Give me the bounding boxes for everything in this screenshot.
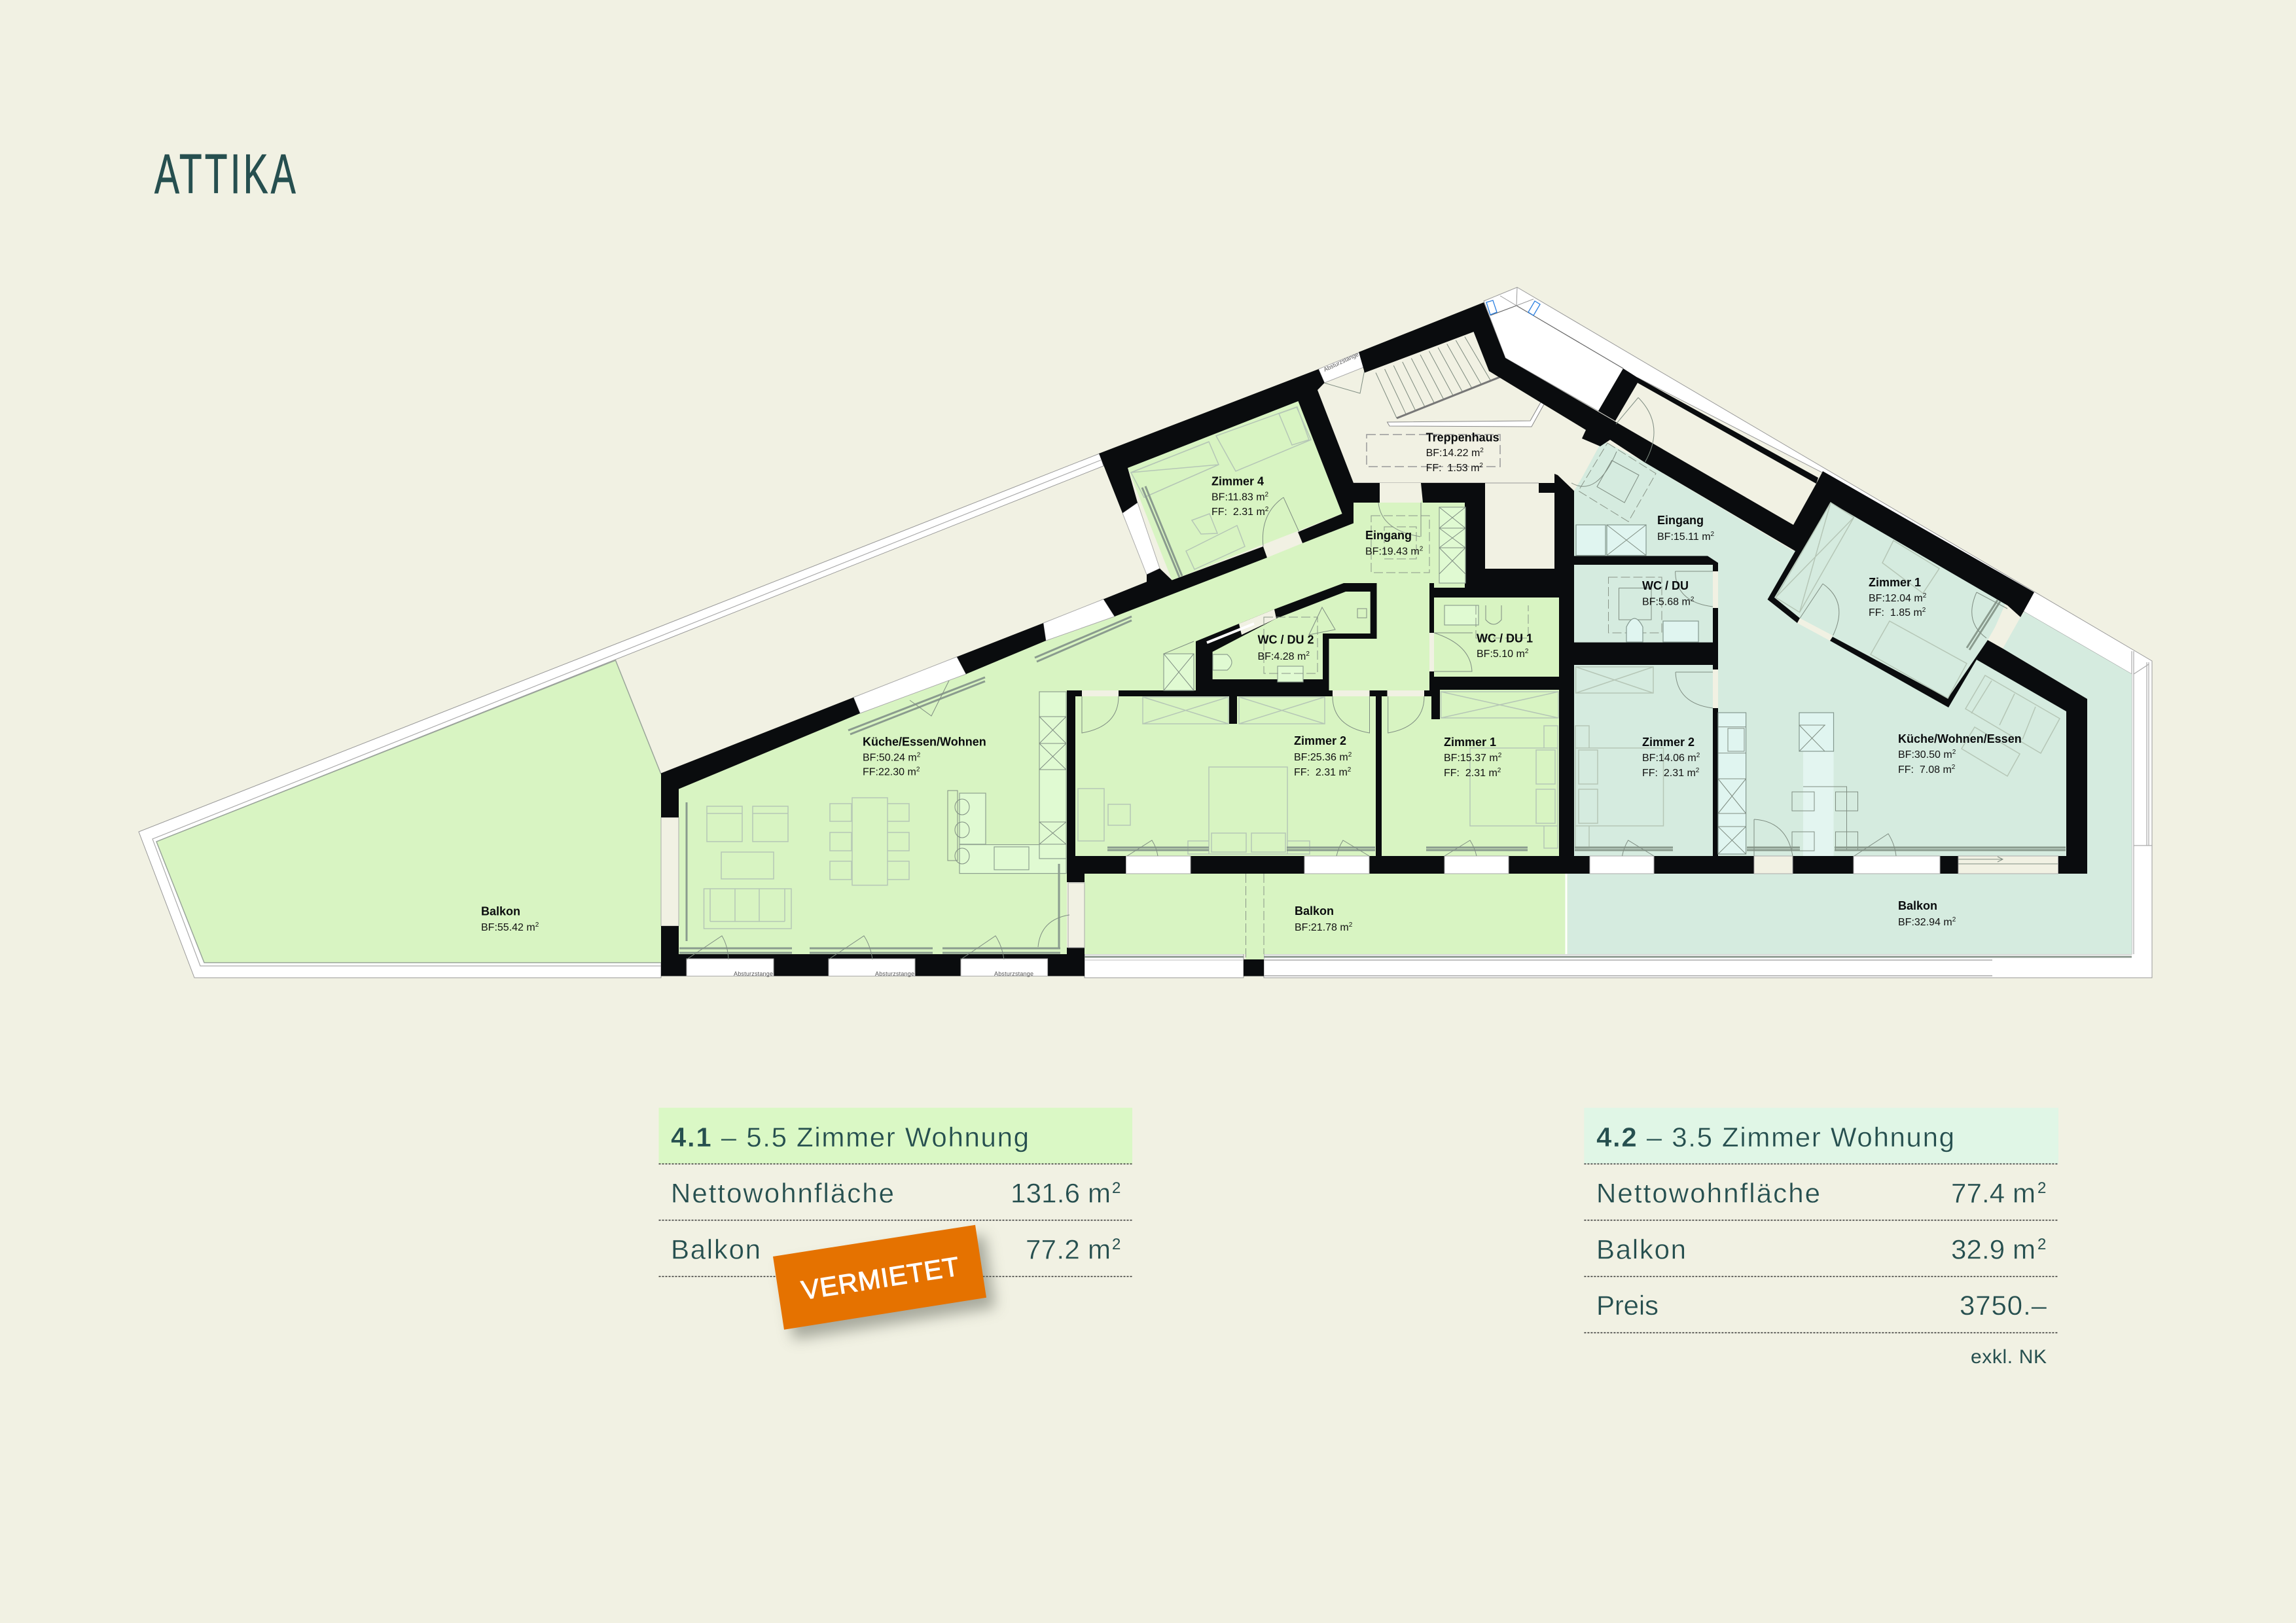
room label: WC DU: 2 [1691,596,1695,603]
room label: WC DU 1: BF:5.10 m [1477,649,1525,660]
room label: Balkon west: 2 [535,921,539,929]
room label: Zimmer 2 east [1642,736,1700,779]
furniture zimmer 2 east [1575,667,1713,856]
window openings west [853,352,1365,713]
balcony middle [1085,874,1568,959]
room label: Balkon east [1898,899,1956,928]
row Balkon 4.1 [671,1234,1121,1264]
floor plan [139,287,2152,978]
room label: Zimmer 2 east: 2 [1696,752,1700,759]
apartment 4.2 floor [1574,440,2068,857]
room label: Zimmer 2: 2 [1348,751,1352,758]
room label: Balkon east: 2 [1952,916,1956,923]
room label: WC DU 2: WC / DU 2 [1258,633,1314,646]
stamp: vermietet [773,1225,996,1340]
room label: Balkon west: Balkon [481,904,520,918]
room label: Kueche Essen Wohnen: Küche/Essen/Wohnen [863,735,986,748]
row Nettowohnflaeche 4.1: 131.6 m [1011,1178,1111,1208]
room label: Balkon middle: Balkon [1295,904,1334,918]
window labels: Absturzstange [1323,351,1359,373]
room label: Kueche Wohnen Essen: 2 [1952,749,1956,756]
room label: Zimmer 1 east: BF:12.04 m [1869,593,1923,604]
room label: Balkon middle [1295,904,1353,933]
room label: WC DU 1: WC / DU 1 [1477,632,1533,645]
stamp shadow [782,1235,996,1340]
room label: Eingang 4.1: 2 [1420,546,1424,553]
room label: Zimmer 4: FF: 2.31 m [1211,507,1265,518]
furniture zimmer 2 [1078,696,1375,856]
room label: Zimmer 4: Zimmer 4 [1211,474,1264,488]
stamp body [773,1225,986,1330]
room label: WC DU [1642,579,1695,607]
stairwell stairs [1324,336,1545,483]
row Preis 4.2: Preis [1596,1290,1659,1321]
room label: Zimmer 2 east: BF:14.06 m [1642,753,1696,764]
room label: Zimmer 1: BF:15.37 m [1444,753,1498,764]
window labels [734,351,1359,977]
black walls [661,302,2087,976]
furniture zimmer 1 [1388,692,1558,856]
furniture kitchen 4.1 [679,616,1132,959]
room label: Kueche Wohnen Essen [1898,732,2022,776]
room label: Balkon west [481,904,539,933]
room label: Kueche Essen Wohnen [863,735,986,778]
room label: Kueche Wohnen Essen: FF: 7.08 m [1898,764,1952,776]
room label: Eingang 4.1 [1365,529,1424,558]
room label: Kueche Essen Wohnen: 2 [916,766,920,774]
room label: WC DU: WC / DU [1642,579,1689,592]
beige niche east [1615,383,1816,525]
table: apartment 4.2 [1584,1108,2058,1368]
row Nettowohnflaeche 4.1 [671,1178,1121,1208]
white windows south [687,856,1940,976]
room label: WC DU 2 [1258,633,1314,662]
room label: Zimmer 1 east: FF: 1.85 m [1869,607,1922,618]
room label: WC DU 1: 2 [1525,648,1529,655]
room label: Zimmer 1 east: Zimmer 1 [1869,576,1921,589]
row Balkon 4.2: 32.9 m [1951,1234,2036,1264]
room label: Kueche Wohnen Essen: BF:30.50 m [1898,749,1952,760]
room label: Zimmer 4: 2 [1265,491,1269,499]
apartment 4.1 floor [674,501,1561,961]
white terrace edge north-east [1264,287,2152,978]
furniture hall [1164,503,1465,690]
row Nettowohnflaeche 4.2: 2 [2037,1179,2046,1197]
room label: Zimmer 2 east: Zimmer 2 [1642,736,1695,749]
row Balkon 4.1: 2 [1112,1236,1121,1253]
door gaps [1068,483,2058,948]
zimmer 4 floor [1128,401,1342,580]
row Preis 4.2 [1596,1290,2047,1321]
room label: Zimmer 1: FF: 2.31 m [1444,768,1498,779]
kitchen 4.2 [1718,675,2066,864]
balcony east [1568,612,2132,954]
header 4.1 [658,1108,1132,1164]
row Nettowohnflaeche 4.2: Nettowohnfläche [1596,1178,1820,1208]
stamp text: VERMIETET [799,1251,961,1306]
edge details [152,287,2152,976]
row Balkon 4.2 [1596,1234,2046,1264]
header text 4.1: 4.1 – 5.5 Zimmer Wohnung [671,1122,1029,1152]
room label: Kueche Essen Wohnen: BF:50.24 m [863,752,917,763]
room label: Kueche Wohnen Essen: 2 [1952,764,1956,771]
room label: Eingang 4.1: Eingang [1365,529,1412,542]
room label: Treppenhaus: 2 [1479,462,1483,469]
row Balkon 4.2: 2 [2037,1236,2046,1253]
furniture entrance 4.2 [1571,398,1656,556]
row Balkon 4.2: Balkon [1596,1234,1686,1264]
room label: Balkon west: BF:55.42 m [481,922,535,933]
row Balkon 4.1: 77.2 m [1026,1234,1111,1264]
room label: Eingang 4.2: BF:15.11 m [1657,531,1711,543]
room label: Kueche Essen Wohnen: 2 [917,751,921,758]
balcony west edge lines [156,660,661,963]
room label: WC DU: BF:5.68 m [1642,597,1691,607]
room label: Zimmer 2 [1294,734,1352,778]
furniture wc du 4.2 [1609,571,1713,642]
balcony middle dashed divider [1246,874,1264,959]
room label: Zimmer 2: Zimmer 2 [1294,734,1346,747]
balcony west [156,660,661,963]
room label: Zimmer 1 east [1869,576,1927,618]
furniture wc du 2 [1213,607,1367,682]
window labels: Absturzstange [734,971,773,977]
window labels: Absturzstange [875,971,914,977]
row Nettowohnflaeche 4.2: 77.4 m [1951,1178,2036,1208]
row Nettowohnflaeche 4.1: 2 [1112,1179,1121,1197]
room label: Treppenhaus: FF: 1.53 m [1426,463,1479,474]
room label: Zimmer 1: 2 [1498,752,1502,759]
table: apartment 4.1 [658,1108,1132,1276]
room label: WC DU 2: BF:4.28 m [1258,651,1306,662]
room label: Treppenhaus: Treppenhaus [1426,431,1499,444]
room label: Zimmer 4 [1211,474,1269,518]
white terrace edge west [139,454,1103,978]
room label: Eingang 4.2 [1657,514,1715,543]
room label: Zimmer 1 east: 2 [1922,607,1926,614]
room label: Balkon middle: 2 [1349,921,1353,929]
room label: Zimmer 2: 2 [1348,766,1352,774]
furniture zimmer 1 east [1776,503,2007,698]
room label: WC DU 1 [1477,632,1533,660]
room label: Zimmer 1: Zimmer 1 [1444,736,1496,749]
row Nettowohnflaeche 4.2 [1596,1178,2046,1208]
room label: Zimmer 1 east: 2 [1923,592,1927,599]
room label: Treppenhaus [1426,431,1499,474]
title: ATTIKA [154,144,296,205]
row Preis 4.2: 3750.– [1960,1290,2047,1321]
room label: Zimmer 1 [1444,736,1502,779]
room label: Zimmer 1: 2 [1498,767,1501,774]
furniture zimmer 4 [1131,407,1311,577]
room label: Zimmer 4: BF:11.83 m [1211,492,1265,503]
room label: Treppenhaus: 2 [1480,447,1484,454]
dotted rules 4.1 [658,1164,1132,1276]
row Balkon 4.1: Balkon [671,1234,761,1264]
balcony divider [1566,874,1567,954]
header 4.2 [1584,1108,2058,1164]
room label: Zimmer 2 east: FF: 2.31 m [1642,768,1696,779]
header text 4.2: 4.2 – 3.5 Zimmer Wohnung [1596,1122,1954,1152]
room label: Eingang 4.2: 2 [1711,531,1715,538]
room label: Kueche Wohnen Essen: Küche/Wohnen/Essen [1898,732,2022,745]
room label: Balkon east: BF:32.94 m [1898,917,1952,928]
room label: Zimmer 4: 2 [1265,506,1269,513]
beige balcony door west [661,817,679,926]
white terrace edge south [1085,954,1244,978]
furniture wc du 1 [1434,605,1528,671]
wc window slot [1207,624,1254,643]
room label: Balkon middle: BF:21.78 m [1295,922,1349,933]
room label: Eingang 4.1: BF:19.43 m [1365,546,1420,558]
room label: Zimmer 2 east: 2 [1696,767,1700,774]
row Nettowohnflaeche 4.1: Nettowohnfläche [671,1178,894,1208]
room label: Treppenhaus: BF:14.22 m [1426,448,1480,459]
dotted rules 4.2 [1584,1164,2058,1332]
room label: Kueche Essen Wohnen: FF:22.30 m [863,767,916,778]
room label: Zimmer 2: BF:25.36 m [1294,752,1348,763]
room label: Zimmer 2: FF: 2.31 m [1294,767,1348,778]
note exkl NK: exkl. NK [1971,1346,2047,1368]
window labels: Absturzstange [994,971,1033,977]
room label: WC DU 2: 2 [1306,651,1310,658]
room label: Eingang 4.2: Eingang [1657,514,1704,527]
room label: Balkon east: Balkon [1898,899,1937,912]
